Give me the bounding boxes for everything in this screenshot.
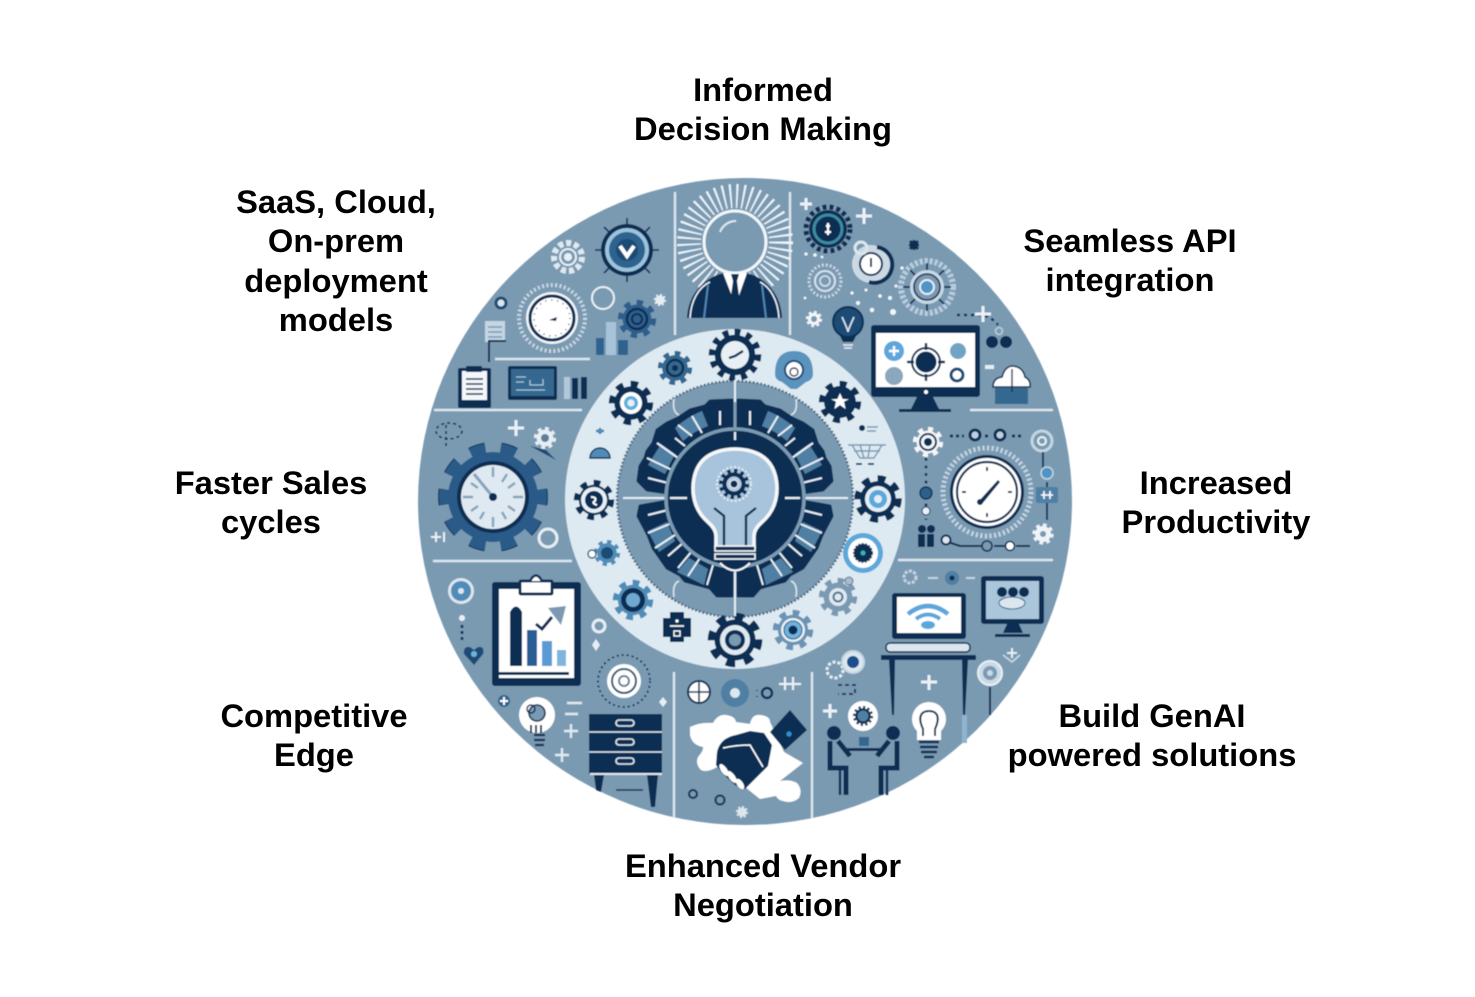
- icon: blue cog top left: [660, 353, 690, 383]
- icon: blue pin head: [775, 351, 813, 389]
- icon: small marks: [555, 703, 582, 762]
- icon: tablet screen: [508, 366, 557, 400]
- icon: globe and nodes: [688, 677, 801, 707]
- label: SaaS, Cloud, On-prem deployment models: On-prem: [268, 222, 404, 259]
- icon: blue plus node: [498, 695, 510, 707]
- sector dividers: [433, 192, 1053, 818]
- label: SaaS, Cloud, On-prem deployment models: deployment: [244, 262, 428, 299]
- label: Competitive Edge: Edge: [274, 736, 354, 773]
- label: SaaS, Cloud, On-prem deployment models: SaaS, Cloud,: [236, 183, 436, 220]
- label: Faster Sales cycles: Faster Sales: [175, 464, 367, 501]
- icon: cloud over box: [985, 365, 1030, 404]
- icon: monitor with team: [981, 576, 1044, 637]
- icon: small sparkles: [592, 620, 667, 707]
- icon: desktop monitor dashboard: [871, 325, 980, 412]
- icon: small gear white: [807, 312, 821, 326]
- icon: side nodes: [1036, 452, 1058, 520]
- label: SaaS, Cloud, On-prem deployment models: models: [279, 301, 393, 338]
- icon: ring gear lower left: [539, 529, 557, 547]
- cross lines: [623, 380, 848, 616]
- icon: grey gear: [822, 577, 854, 613]
- icon: dark cog left: [577, 483, 611, 517]
- icon: note with bracket: [485, 321, 506, 362]
- icon: dotted coin: [598, 655, 650, 707]
- icon: open ring: [592, 287, 614, 309]
- label: Competitive Edge: Competitive: [220, 697, 408, 734]
- icon: people at table: [827, 726, 900, 795]
- icon: lower left cog: [616, 583, 650, 617]
- label: Increased Productivity: Productivity: [1122, 503, 1310, 540]
- icon: white lightbulb: [912, 702, 946, 757]
- ring icons: [577, 332, 898, 663]
- label: Enhanced Vendor Negotiation: Negotiation: [673, 886, 853, 923]
- label: Informed Decision Making: Informed: [693, 71, 833, 108]
- label: Enhanced Vendor Negotiation: Enhanced Vendor: [625, 847, 901, 884]
- icon: bottom dark gear: [712, 617, 758, 663]
- label: Seamless API integration: Seamless API: [1023, 222, 1237, 259]
- icon: chevron badge gear: [595, 218, 659, 282]
- label: Build GenAI powered solutions: powered solutions: [1008, 736, 1296, 773]
- wheel graphic: [418, 178, 1072, 825]
- central brain with lightbulb: [623, 380, 848, 616]
- icon: laptop on table with wifi: [881, 593, 976, 743]
- icon: large gauge: [943, 448, 1031, 536]
- icon: plus marks: [800, 198, 872, 224]
- label: Build GenAI powered solutions: Build GenAI: [1058, 697, 1246, 734]
- icon: blue gear: [621, 303, 653, 335]
- icon: clock gear: [444, 448, 542, 546]
- icon: dollar gear: [806, 207, 850, 251]
- label: Seamless API integration: integration: [1046, 261, 1214, 298]
- icon: dark star gear: [822, 384, 858, 420]
- icon: eye gear: [776, 613, 810, 647]
- icon: dark star: [909, 240, 919, 250]
- icon: dotted ring: [809, 265, 841, 297]
- icon: target pin: [978, 648, 1020, 715]
- icon: clipboard document: [458, 366, 491, 408]
- icon: idea bulb: [519, 697, 555, 745]
- icon: gears cluster: [827, 651, 864, 694]
- icon: team node line: [918, 507, 1052, 551]
- label: Increased Productivity: Increased: [1140, 464, 1292, 501]
- icon: small ring: [496, 298, 506, 308]
- connector curves: [674, 399, 796, 597]
- icon: dome badge: [590, 428, 610, 458]
- brain lobes, left half: [638, 400, 732, 596]
- icon: dotted connector with link: [957, 306, 1012, 348]
- inner ring: [565, 329, 905, 669]
- label: Faster Sales cycles: cycles: [221, 503, 321, 540]
- icon: white gear disc: [823, 675, 937, 731]
- icon: target with dots: [448, 578, 483, 665]
- icon: mini bars: [596, 322, 628, 355]
- icon: clock gear top: [712, 332, 758, 378]
- icon: executive with radiant head: [687, 196, 782, 318]
- icon: white speckles: [804, 252, 904, 315]
- brain lobes, right half: [738, 400, 832, 596]
- icon: gears on divider: [904, 571, 975, 585]
- icon: dark gear right: [858, 479, 898, 519]
- icon: dark cog with blue eye: [612, 384, 650, 422]
- icon: power knob: [852, 242, 892, 283]
- icon: gauge: [519, 285, 585, 351]
- icon: dark bulb: [833, 307, 863, 348]
- inner disc: [617, 381, 853, 617]
- icon: white dotted gear: [554, 243, 582, 271]
- icon: basket: [848, 425, 886, 464]
- icon: small gear and shards: [431, 420, 556, 542]
- icon: sunburst target: [901, 261, 953, 313]
- icon: handshake on puzzle pieces: [689, 710, 807, 817]
- label: Informed Decision Making: Decision Making: [634, 110, 892, 147]
- icon: blue gear with ring: [588, 542, 618, 564]
- icon: clipboard bar chart: [492, 576, 581, 686]
- icon: dark cross badge: [663, 612, 691, 642]
- outer disc: [418, 178, 1072, 825]
- icon: gear node chain: [915, 429, 1052, 520]
- icon: lightbulb: [693, 449, 777, 570]
- dark core ring: [666, 429, 804, 567]
- icon: bottles: [564, 377, 587, 399]
- icon: blue ring badge: [843, 533, 883, 573]
- icon: tiny white gear: [655, 295, 665, 305]
- icon: filing drawers: [589, 714, 662, 807]
